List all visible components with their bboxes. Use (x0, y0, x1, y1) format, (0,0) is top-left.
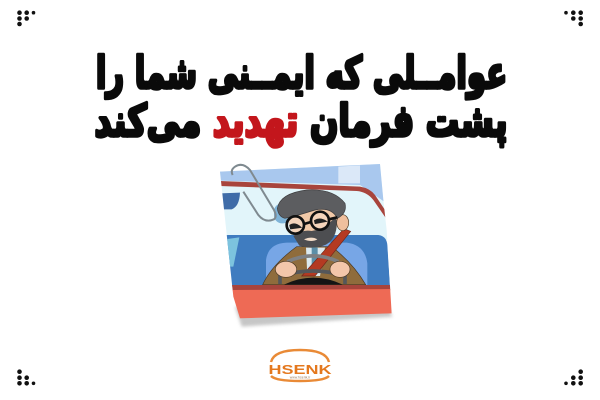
illustration: driver on paper note (213, 160, 397, 327)
shirt (306, 248, 325, 276)
title (95, 47, 507, 147)
note shadow (235, 307, 393, 327)
rear mirror (220, 193, 240, 209)
corner ornament: bottom right (564, 369, 583, 386)
seat and cabin (220, 235, 390, 287)
sky and windscreen (221, 180, 388, 240)
title: عوامــلی که ایمــنی شما را (96, 47, 507, 98)
logo url: www.hsenk.ir (290, 376, 311, 380)
corner ornament: bottom left (17, 369, 35, 386)
car body (227, 285, 397, 290)
seat belt (302, 229, 351, 276)
beard (293, 217, 337, 248)
jacket (263, 247, 366, 285)
corner ornament: top left (17, 10, 35, 26)
logo text: HSENK (268, 363, 332, 377)
corner ornament: top right (564, 10, 583, 26)
title: پشت فرمان تهدید می‌کند (95, 97, 507, 147)
roof band (221, 181, 386, 218)
logo ring (271, 350, 329, 381)
glasses (287, 212, 337, 234)
hands (275, 261, 297, 277)
face (287, 203, 337, 245)
logo: HSENK (268, 350, 332, 381)
paper clip (232, 165, 276, 221)
steering wheel (280, 271, 345, 284)
paper note scene (213, 160, 397, 320)
hair (277, 190, 345, 218)
